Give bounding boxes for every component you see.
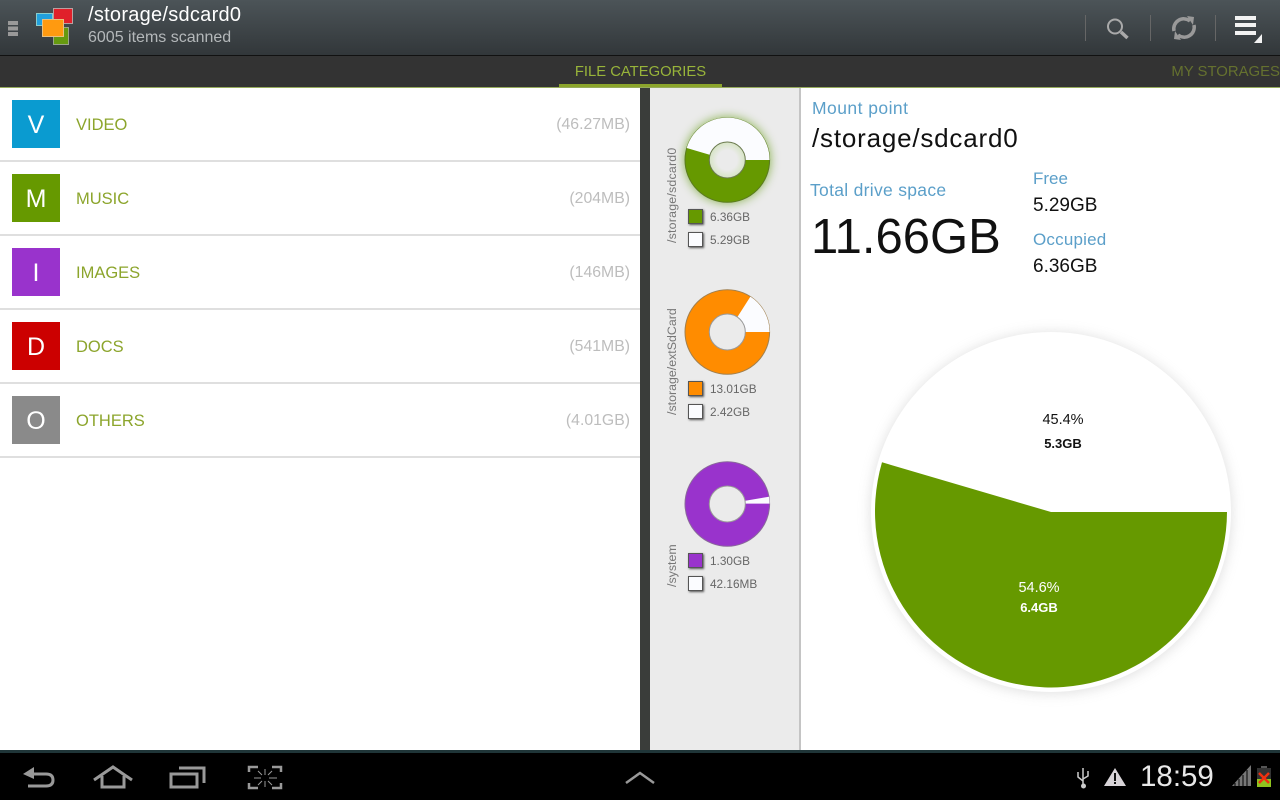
panel: storages sidebar: 42.16MB (710, 577, 757, 591)
row: video (0, 88, 640, 162)
row: music: MUSIC (76, 190, 129, 208)
donut chart: extSdCard (684, 289, 770, 375)
panel: drive details (801, 88, 1280, 750)
row: images (0, 236, 640, 310)
row: music: (204MB) (569, 190, 630, 207)
label: sdcard0: /storage/sdcard0 (665, 148, 679, 243)
row: images: IMAGES (76, 264, 140, 282)
value: occupied: 6.36GB (1033, 256, 1097, 277)
system navigation bar (0, 750, 1280, 800)
row: video: (46.27MB) (556, 116, 630, 133)
label: total drive space: Total drive space (810, 180, 946, 200)
legend: system used (688, 553, 703, 568)
divider (640, 88, 650, 750)
label: free: Free (1033, 169, 1068, 188)
donut chart: sdcard0 (676, 110, 778, 210)
legend: system free (688, 576, 703, 591)
row: docs: DOCS (76, 338, 124, 356)
row: docs: D (27, 333, 45, 361)
status clock: 18:59 (1140, 760, 1214, 793)
panel: storages sidebar: 13.01GB (710, 382, 757, 396)
icon: drawer handle (8, 21, 18, 36)
value: mount point: /storage/sdcard0 (812, 123, 1018, 153)
panel: file categories list (0, 88, 640, 750)
panel: storages sidebar: 5.29GB (710, 233, 750, 247)
panel: storages sidebar: 1.30GB (710, 554, 750, 568)
row: video: V (28, 111, 44, 139)
text: occupied share: 54.6% (1018, 580, 1060, 596)
panel: storages sidebar: 2.42GB (710, 405, 750, 419)
slice: occupied (875, 462, 1227, 687)
row: others: OTHERS (76, 412, 145, 430)
label: system: /system (665, 544, 679, 587)
pie chart: drive usage (866, 328, 1236, 698)
value: free: 5.29GB (1033, 195, 1097, 216)
action icons (1085, 15, 1262, 43)
navigation icons (23, 765, 655, 790)
row: others: O (26, 407, 46, 435)
row: docs (0, 310, 640, 384)
title: storage path: /storage/sdcard0 (88, 4, 241, 26)
row: others (0, 384, 640, 458)
row: music (0, 162, 640, 236)
panel: storages sidebar (650, 88, 801, 750)
text: free size: 5.3GB (1044, 436, 1082, 451)
legend: sdcard0 free (688, 232, 703, 247)
tab: my storages: MY STORAGES (1171, 64, 1280, 80)
label: occupied: Occupied (1033, 230, 1106, 249)
text: free share: 45.4% (1042, 412, 1084, 428)
label: mount point: Mount point (812, 98, 908, 118)
status icons (1077, 765, 1271, 788)
tab: file categories: FILE CATEGORIES (575, 64, 706, 80)
tab bar (0, 56, 1280, 88)
subtitle: scan count: 6005 items scanned (88, 29, 231, 46)
panel: storages sidebar: 6.36GB (710, 210, 750, 224)
legend: extSdCard free (688, 404, 703, 419)
legend: sdcard0 used (688, 209, 703, 224)
label: extSdCard: /storage/extSdCard (665, 308, 679, 415)
row: others: (4.01GB) (566, 412, 630, 429)
row: music: M (26, 185, 46, 213)
tab: file categories (559, 56, 722, 87)
donut chart: system (684, 461, 770, 547)
row: video: VIDEO (76, 116, 127, 134)
text: occupied size: 6.4GB (1020, 600, 1058, 615)
row: images: (146MB) (569, 264, 630, 281)
top action bar (0, 0, 1280, 56)
row: docs: (541MB) (569, 338, 630, 355)
icon: app logo (36, 8, 73, 45)
row: images: I (33, 259, 39, 287)
value: total drive space: 11.66GB (811, 210, 1001, 264)
legend: extSdCard used (688, 381, 703, 396)
